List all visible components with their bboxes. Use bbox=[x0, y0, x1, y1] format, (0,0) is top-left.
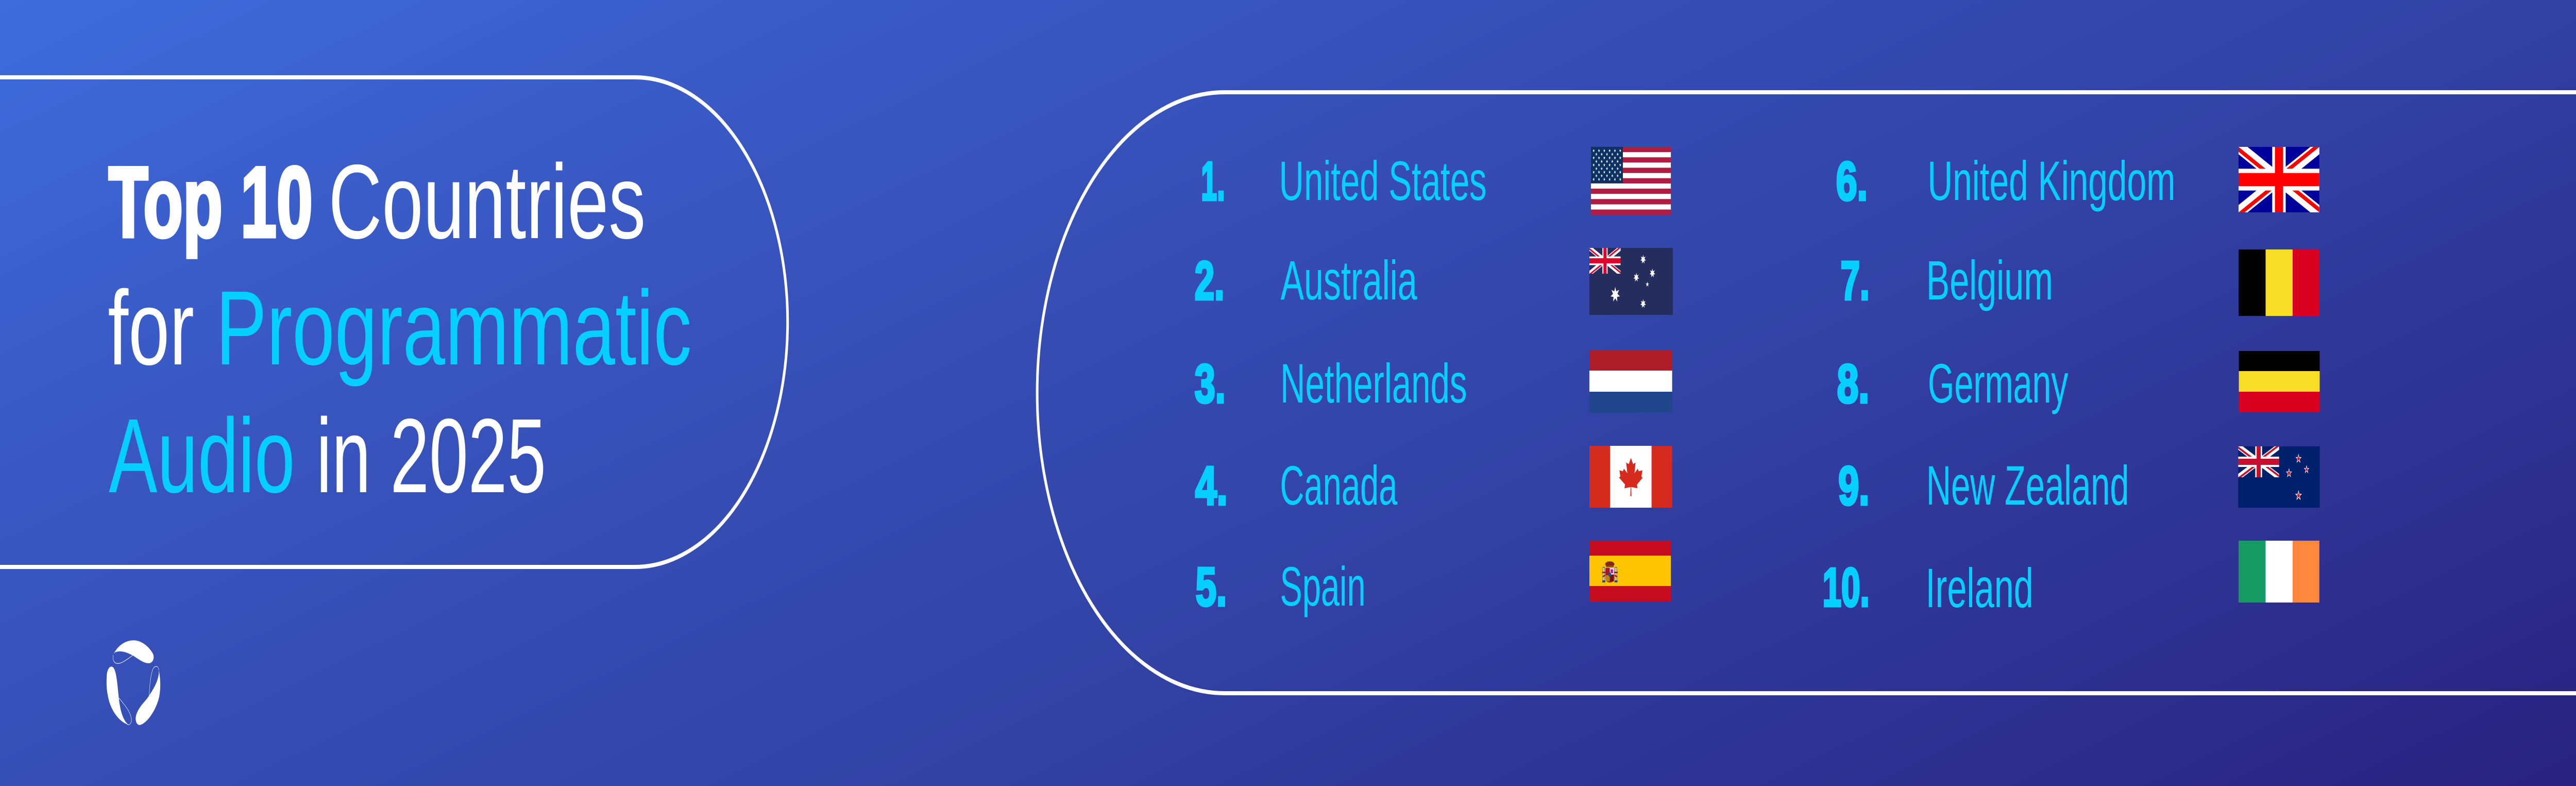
title line 1: Countries bbox=[329, 143, 646, 261]
title line 1: Top 10 bbox=[109, 147, 313, 258]
rank row 6: United Kingdom: 6. bbox=[1836, 150, 1868, 212]
title bbox=[108, 143, 691, 515]
rank row 5: Spain: 5. bbox=[1196, 556, 1227, 617]
rank row 6: United Kingdom bbox=[1836, 147, 2319, 212]
flag: Belgium bbox=[2239, 249, 2319, 316]
rank row 7: Belgium: Belgium bbox=[1926, 249, 2053, 312]
flag: New Zealand bbox=[2238, 446, 2319, 508]
rank row 1: United States: 1. bbox=[1201, 150, 1225, 212]
flag: Spain bbox=[1589, 541, 1671, 601]
rank row 10: Ireland bbox=[1823, 541, 2319, 620]
title line 3: in 2025 bbox=[316, 397, 546, 515]
rank row 4: Canada bbox=[1195, 446, 1672, 517]
panel: title pill outline bbox=[0, 77, 788, 567]
rank row 8: Germany: Germany bbox=[1928, 353, 2068, 415]
icon: brand logo bbox=[107, 640, 160, 725]
rank row 4: Canada: 4. bbox=[1195, 455, 1228, 516]
title line 3 bbox=[109, 397, 546, 515]
rank row 10: Ireland: Ireland bbox=[1926, 557, 2033, 620]
panel: ranking pill outline bbox=[1037, 92, 2576, 693]
rank row 4: Canada: Canada bbox=[1280, 455, 1398, 517]
rank row 9: New Zealand bbox=[1838, 446, 2319, 508]
rank row 1: United States: United States bbox=[1279, 150, 1487, 212]
rank row 5: Spain: Spain bbox=[1280, 556, 1366, 618]
flag: Australia bbox=[1589, 248, 1673, 315]
flag: United States bbox=[1591, 147, 1671, 215]
rank row 2: Australia: Australia bbox=[1281, 249, 1417, 312]
rank row 9: New Zealand: 9. bbox=[1838, 455, 1869, 516]
rank row 2: Australia bbox=[1195, 248, 1673, 315]
flag: Ireland bbox=[2239, 541, 2319, 603]
rank row 3: Netherlands: 3. bbox=[1195, 353, 1226, 414]
rank row 8: Germany: 8. bbox=[1837, 353, 1869, 414]
flag: Netherlands bbox=[1589, 350, 1672, 413]
flag: Canada bbox=[1589, 446, 1672, 508]
rank row 5: Spain bbox=[1196, 541, 1671, 618]
rank row 9: New Zealand: New Zealand bbox=[1926, 455, 2129, 517]
title line 1 bbox=[109, 143, 646, 261]
rank row 3: Netherlands bbox=[1195, 350, 1672, 415]
flag: Germany bbox=[2239, 351, 2319, 412]
rank row 8: Germany bbox=[1837, 351, 2319, 415]
rank row 6: United Kingdom: United Kingdom bbox=[1927, 150, 2175, 212]
title line 2: for bbox=[108, 269, 194, 387]
rank row 7: Belgium bbox=[1840, 249, 2319, 316]
rank row 2: Australia: 2. bbox=[1195, 250, 1224, 311]
rank row 10: Ireland: 10. bbox=[1823, 557, 1870, 618]
title line 2: Programmatic bbox=[216, 269, 692, 387]
rank row 7: Belgium: 7. bbox=[1840, 250, 1870, 311]
rank row 1: United States bbox=[1201, 147, 1671, 215]
flag: United Kingdom bbox=[2239, 147, 2319, 212]
rank row 3: Netherlands: Netherlands bbox=[1280, 353, 1467, 415]
title line 3: Audio bbox=[109, 397, 295, 515]
